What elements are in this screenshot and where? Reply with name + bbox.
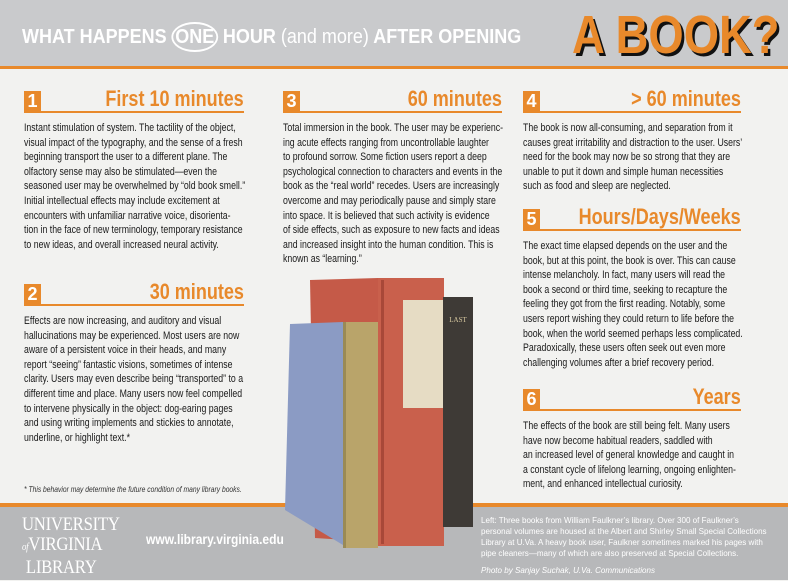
panel 3 heading: 60 minutes [408,86,502,111]
panel 3 text: of side effects, such as exposure to new facts and ideas [283,224,500,236]
panel 4 text: unable to put it down and simple human necessities [523,166,723,178]
panel 6 heading [523,389,741,411]
black book: LAST [449,316,467,324]
panel 3 text: psychological connection to characters and events in the [283,166,502,178]
panel 2 heading [24,284,244,306]
panel 6 text: ment, and enhanced intellectual curiosity. [523,478,683,490]
panel 2 text: and using writing implements and stickies to annotate, [24,417,234,429]
panel 3 text: and increased insight into the human condition. This is [283,239,493,251]
panel 1 heading [24,91,244,113]
panel 5 heading: 5 [526,209,536,229]
panel 2 text: aware of a persistent voice in their heads, and many [24,344,226,356]
caption: Photo by Sanjay Suchak, U.Va. Communications [481,565,655,575]
panel 1 heading: 1 [27,91,38,111]
footnote: * This behavior may determine the future condition of many library books. [24,485,242,494]
panel 1 text: beginning transport the user to a different plane. The [24,151,227,163]
panel 3 text: to profound sorrow. Some fiction users report a deep [283,151,487,163]
panel 3 text: overcome and may periodically pause and simply stare [283,195,496,207]
panel 2 text: Effects are now increasing, and auditory and visual [24,315,221,327]
panel 2 text: report “seeing” fantastic visions, sometimes of intense [24,359,233,371]
title: A BOOK?: A BOOK? [572,5,779,65]
panel 6 text: an increased level of general knowledge and caught in [523,449,734,461]
panel 5 heading: Hours/Days/Weeks [579,204,741,229]
panel 3 text: known as “learning.” [283,253,362,265]
panel 4 text: causes great irritability and distraction to the user. Users’ [523,137,742,149]
panel 5 text: intense melancholy. In fact, many users will read the [523,269,725,281]
panel 4 text [523,122,742,192]
panel 5 text: The exact time elapsed depends on the user and the [523,240,727,252]
panel 5 text [523,240,743,369]
photo: three books [285,278,473,548]
panel 3 heading [283,91,502,113]
panel 1 text: tion in the face of new terminology, temporary resistance [24,224,243,236]
url: www.library.virginia.edu [146,531,284,547]
panel 5 text: users report wishing they could return to life before the [523,313,734,325]
caption: pipe cleaners—many of which are also preserved at Special Collections. [481,548,738,558]
caption [481,515,767,575]
panel 6 heading: Years [693,384,741,409]
caption: personal volumes are housed at the Albert and Shirley Small Special Collections [481,526,767,536]
panel 1 heading: First 10 minutes [106,86,244,111]
footer band [0,503,788,580]
logo: University of Virginia Library [22,514,120,578]
panel 4 text: The book is now all-consuming, and separation from it [523,122,733,134]
panel 6 text: have now become habitual readers, saddled with [523,435,713,447]
panel 5 text: challenging volumes after a brief recovery period. [523,357,714,369]
blue book [285,322,378,548]
panel 6 heading: 6 [526,389,536,409]
panel 4 text: such as food and sleep are neglected. [523,180,671,192]
panel 1 text: encounters with unfamiliar narrative voice, disorienta- [24,210,231,222]
panel 3 text [283,122,503,265]
panel 1 text [24,122,245,251]
logo: University of Virginia Library: ofVIRGINIA [22,534,102,555]
panel 1 text: seasoned user may be overwhelmed by “old book smell.” [24,180,245,192]
panel 5 heading [523,209,741,231]
panel 3 text: ing acute effects ranging from uncontrollable laughter [283,137,489,149]
panel 4 heading [523,91,741,113]
panel 2 text: underline, or highlight text.* [24,432,130,444]
panel 5 text: book a second or third time, seeking to recapture the [523,284,727,296]
panel 6 text [523,420,736,490]
panel 4 text: need for the book may now be so strong that they are [523,151,730,163]
panel 4 heading: > 60 minutes [631,86,741,111]
caption: Library at U.Va. A heavy book user, Faulkner sometimes marked his pages with [481,537,763,547]
panel 3 text: into space. It is believed that such activity is evidence [283,210,490,222]
panel 1 text: Instant stimulation of system. The tactility of the object, [24,122,236,134]
panel 1 text: visual impact of the typography, and the sense of a fresh [24,137,243,149]
panel 1 text: Initial intellectual effects may include excitement at [24,195,220,207]
panel 2 heading: 30 minutes [150,279,244,304]
red book [310,278,444,546]
panel 5 text: book, but at this point, the book is over. This can cause [523,255,736,267]
panel 1 text: to new ideas, and overall increased neural activity. [24,239,219,251]
panel 2 text: different time and place. Many users now feel compelled [24,388,242,400]
panel 4 heading: 4 [526,91,536,111]
panel 3 heading: 3 [286,91,296,111]
logo: University of Virginia Library: LIBRARY [26,557,97,578]
title: WHAT HAPPENS HOUR (and more) AFTER OPENING [22,26,521,48]
logo: University of Virginia Library: UNIVERSITY [22,514,120,535]
panel 6 text: The effects of the book are still being felt. Many users [523,420,730,432]
panel 5 text: Paradoxically, these users often seek out even more [523,342,726,354]
title: ONE [175,26,214,48]
panel 2 heading: 2 [27,284,38,304]
black book [443,297,473,527]
caption: Left: Three books from William Faulkner’s library. Over 300 of Faulkner’s [481,515,739,525]
panel 2 text: to intervene physically in the object: dog-earing pages [24,403,233,415]
panel 2 text: clarity. Users may even describe being “transported” to a [24,373,243,385]
panel 2 text: hallucinations may be experienced. Most users are now [24,330,239,342]
panel 1 text: olfactory sense may also be stimulated—even the [24,166,217,178]
panel 3 text: Total immersion in the book. The user may be experienc- [283,122,503,134]
header band [0,0,788,69]
panel 2 text [24,315,244,444]
panel 5 text: book, when the world seemed perhaps less complicated. [523,328,743,340]
panel 5 text: feeling they got from the first reading. Notably, some [523,298,725,310]
panel 6 text: a constant cycle of lifelong learning, ongoing enlighten- [523,464,736,476]
panel 3 text: book as the “real world” recedes. Users are increasingly [283,180,499,192]
